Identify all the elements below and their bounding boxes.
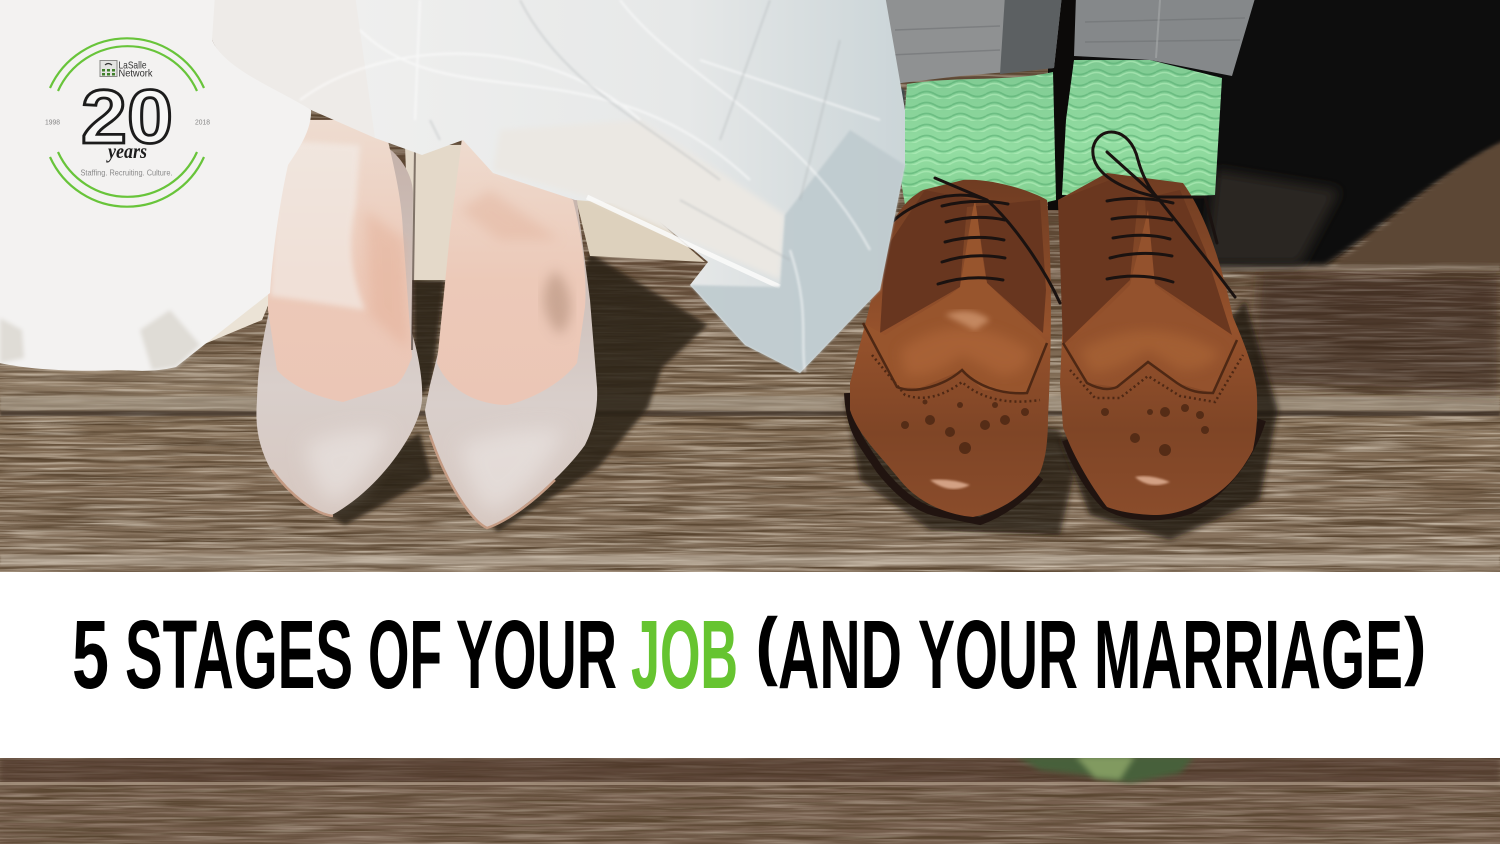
title: YOUR	[456, 600, 617, 709]
start year: 1998	[45, 120, 60, 126]
company name: Network	[118, 68, 153, 80]
wooden deck	[0, 0, 1500, 572]
dark gap between trouser legs	[1048, 17, 1078, 210]
title	[72, 600, 1425, 709]
title: YOUR	[918, 600, 1078, 709]
bride: left leg	[268, 120, 412, 402]
company name: LaSalle	[118, 60, 147, 72]
dress: centre lining	[212, 0, 380, 138]
dress: left tulle edge	[0, 310, 200, 370]
shoelaces	[868, 132, 1235, 303]
title: OF	[368, 600, 442, 709]
title: 5	[72, 600, 109, 709]
dress: centre tulle	[355, 0, 905, 373]
title: JOB	[631, 600, 738, 709]
photo: wedding shoes on wooden deck	[0, 0, 1500, 572]
company mark	[100, 60, 117, 76]
title: )	[1406, 605, 1425, 686]
end year: 2018	[195, 120, 210, 126]
green ring arcs	[50, 38, 204, 207]
white title band	[0, 572, 1500, 758]
green socks	[900, 60, 1222, 205]
bottom strip of wooden deck	[0, 756, 1500, 844]
cast shadows on deck	[300, 253, 1278, 540]
dress underlayer in cream	[206, 145, 705, 344]
title: (	[757, 605, 777, 686]
bride: left silver heel	[256, 147, 422, 516]
groom: left brown brogue	[848, 180, 1051, 521]
green foliage	[1015, 756, 1195, 783]
bride: right silver heel	[425, 173, 597, 528]
logo: LaSalle Network 20 years badge	[45, 38, 210, 207]
big 20: 20	[81, 75, 173, 160]
dark gap beside left sock	[901, 86, 906, 108]
dark background top right	[1040, 0, 1500, 395]
dress: hem	[587, 197, 780, 287]
bride: right leg	[437, 130, 586, 405]
dress: left body	[0, 0, 311, 371]
trousers	[882, 0, 1256, 84]
tagline: Staffing. Recruiting. Culture.	[80, 168, 172, 178]
groom: right brown brogue	[1058, 173, 1262, 516]
years script: years	[106, 141, 147, 163]
company name	[118, 60, 153, 80]
dress: sheer tulle over deck	[690, 130, 905, 373]
title: AND	[778, 600, 902, 709]
title: STAGES	[125, 600, 353, 709]
white wedding dress and tulle	[0, 0, 905, 373]
dress: inner panel blended into the tulle	[498, 133, 784, 278]
leg tone details	[270, 140, 571, 350]
